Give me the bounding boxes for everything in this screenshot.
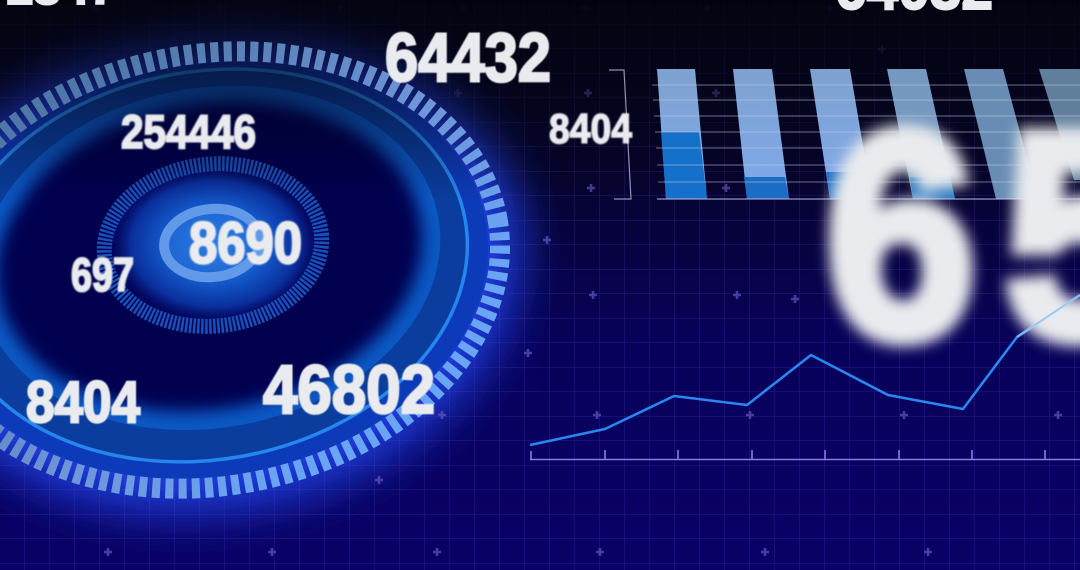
bracket	[609, 70, 631, 199]
bar 2	[733, 69, 789, 199]
radial gauge	[0, 19, 522, 521]
number: 254446: 254446	[121, 105, 256, 158]
ring outer glow	[0, 0, 559, 561]
inner glow	[103, 160, 327, 328]
number: 64432: 64432	[385, 19, 551, 96]
number: 8404 left: 8404	[26, 370, 140, 435]
number: 697: 697	[71, 248, 134, 301]
trend line	[530, 295, 1080, 445]
bar 5	[964, 69, 1038, 199]
core ring	[161, 204, 263, 282]
gauge outer band	[0, 19, 522, 521]
gauge dark well	[0, 68, 447, 444]
number: 46802: 46802	[263, 351, 435, 428]
inner tick ring	[96, 153, 330, 337]
gauge inner band	[0, 50, 468, 466]
bar 6	[1039, 69, 1080, 180]
bar chart gridlines	[652, 85, 1080, 182]
gauge tick ring	[0, 7, 535, 533]
bar chart	[609, 69, 1080, 199]
top shading	[0, 0, 1080, 200]
trend line over number	[1017, 295, 1080, 337]
number: 8404 bar label: 8404	[549, 105, 633, 152]
bar 1	[657, 69, 707, 199]
bar chart baseline	[657, 198, 1080, 200]
bar 3	[810, 69, 872, 199]
bar 4	[887, 69, 955, 199]
axis	[530, 450, 1080, 460]
gauge bright line	[0, 29, 499, 502]
number: 8690: 8690	[189, 211, 302, 276]
line chart	[530, 295, 1080, 460]
